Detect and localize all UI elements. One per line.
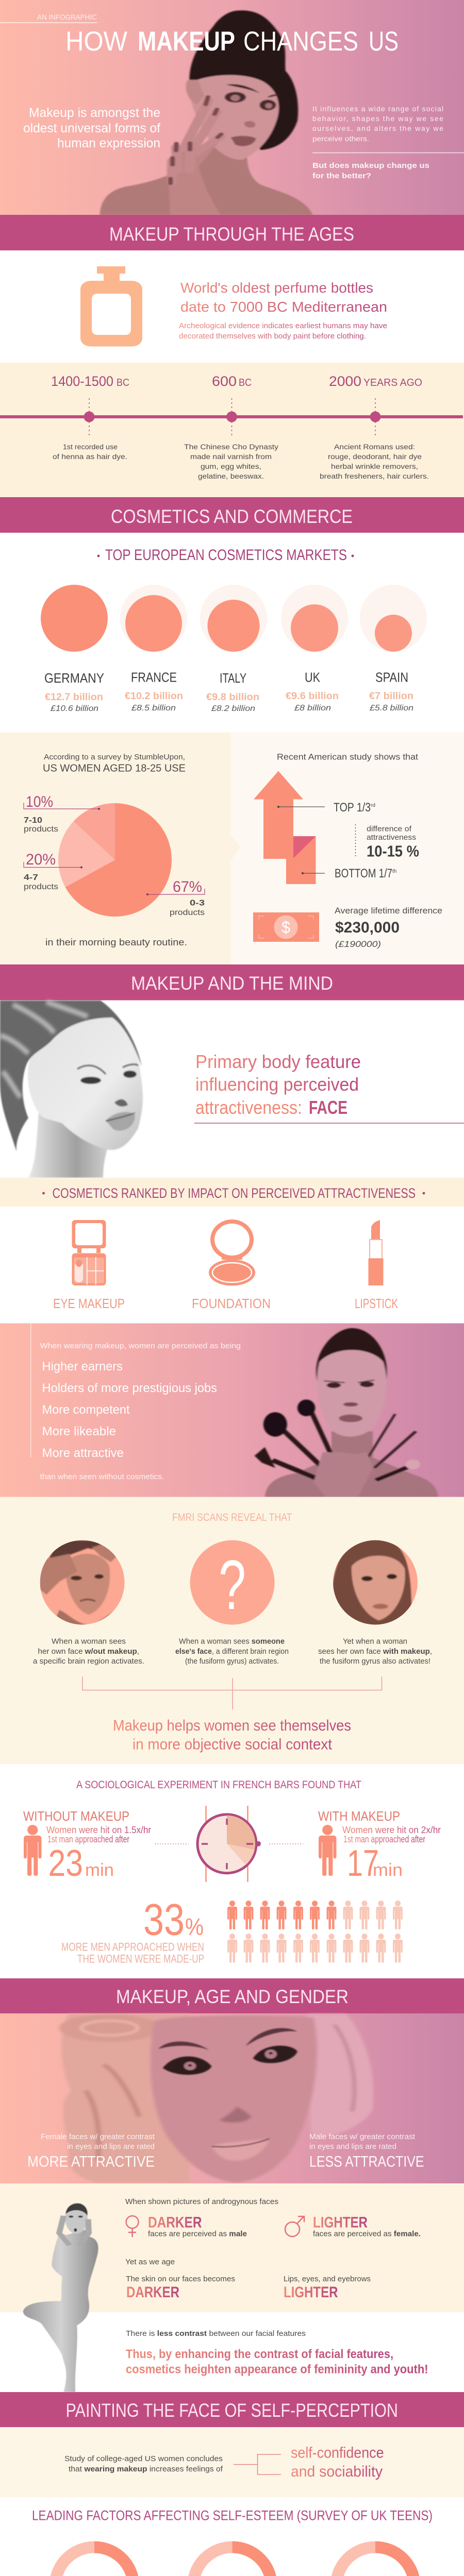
stat: 33 percent more men: MORE MEN APPROACHED WHEN — [61, 1940, 204, 1954]
label: foundation: FOUNDATION — [192, 1296, 271, 1311]
pie label: 67%: 0-3 — [190, 899, 205, 908]
heading band: makeup through the ages — [0, 215, 464, 250]
text: intro left: oldest universal forms of — [23, 121, 160, 135]
text: primary body feature: influencing perceived — [195, 1074, 359, 1095]
timeline: 2000 years ago: YEARS AGO — [363, 377, 422, 388]
stat: 33 percent more men: THE WOMEN WERE MADE-UP — [77, 1953, 204, 1965]
text: intro right: ourselves, and alters the way we — [312, 124, 443, 132]
panel: beauty routine survey: According to a survey by StumbleUpon, — [44, 753, 185, 761]
timeline: 2000 years ago — [320, 374, 429, 480]
panel: contrast and attractiveness — [0, 2013, 464, 2183]
text: intro left — [23, 106, 160, 150]
market: uk: UK — [305, 670, 321, 685]
panel: beauty routine survey: in their morning beauty routine. — [45, 937, 187, 947]
icon: banknote: $ — [281, 918, 290, 937]
market: germany: €12.7 billion — [45, 692, 103, 703]
timeline: 1400-1500 BC — [51, 374, 129, 461]
timeline: 600 BC: BC — [239, 377, 252, 388]
icon: venus symbol — [126, 2216, 139, 2237]
list: perceived traits: More competent — [42, 1403, 130, 1417]
chart: market size circles — [41, 585, 427, 713]
market: uk: £8 billion — [294, 704, 331, 713]
market: spain: €7 billion — [369, 691, 413, 702]
label: bottom seventh: th — [392, 869, 396, 874]
timeline: 2000 years ago: rouge, deodorant, hair dye — [328, 452, 422, 461]
stat: darker perceived male: faces are perceived as male — [148, 2230, 247, 2238]
text: without makeup details: min — [85, 1860, 114, 1880]
timeline: 600 BC: gum, egg whites, — [201, 462, 261, 470]
text: with makeup details: 1st man approached after — [343, 1834, 425, 1844]
icon: up and down arrow bars — [254, 771, 316, 884]
icon: watch — [197, 1806, 261, 1882]
stat: lifetime difference: $230,000 — [335, 919, 400, 936]
panel: self-confidence study: Study of college-aged US women concludes — [64, 2454, 223, 2463]
timeline: 600 BC: The Chinese Cho Dynasty — [184, 443, 278, 451]
text: female faces: in eyes and lips are rated — [67, 2142, 155, 2151]
chart: donut 70% — [189, 2547, 275, 2576]
text: primary body feature — [194, 1051, 464, 1124]
photo: woman touching face — [100, 10, 313, 215]
icon: question mark: ? — [219, 1546, 246, 1624]
text: self-confidence and sociability — [291, 2444, 384, 2480]
photo: blonde woman face — [59, 2014, 373, 2182]
text: perfume bottles: decorated themselves with body paint before clothing. — [179, 332, 366, 341]
dotted connector lines — [155, 1843, 303, 1844]
text: fmri column 1: her own face w/out makeup, — [38, 1647, 139, 1656]
text: with makeup details: Women were hit on 2x/hr — [342, 1825, 441, 1835]
text: fmri column 3: Yet when a woman — [343, 1637, 407, 1646]
text: contrast conclusion — [126, 2329, 428, 2376]
text: primary body feature: FACE — [309, 1097, 347, 1118]
panel: attractiveness and earnings: Recent American study shows that — [277, 752, 418, 761]
panel: fmri scans: FMRI SCANS REVEAL THAT — [172, 1512, 292, 1523]
text: perceived as outro: than when seen without cosmetics. — [40, 1472, 164, 1481]
heading band: painting the face of self-perception: PAINTING THE FACE OF SELF-PERCEPTION — [66, 2400, 398, 2421]
panel: hero — [0, 0, 464, 215]
text: male faces: LESS ATTRACTIVE — [309, 2154, 424, 2170]
stat: darker perceived male — [148, 2214, 247, 2238]
stat: without makeup: WITHOUT MAKEUP — [23, 1808, 129, 1824]
stat: lighter perceived female: LIGHTER — [313, 2214, 368, 2231]
icon: lipstick — [368, 1220, 384, 1285]
stat: without makeup — [23, 1808, 151, 1884]
chart: donut 71% — [25, 2547, 153, 2576]
market: france: €10.2 billion — [125, 691, 183, 702]
label: bottom seventh: BOTTOM 1/7 — [335, 867, 392, 880]
text: with makeup details: 17 — [347, 1843, 379, 1884]
timeline: 2000 years ago: herbal wrinkle removers, — [331, 462, 418, 470]
market: france: £8.5 billion — [131, 704, 176, 713]
stat: skin darker — [126, 2275, 235, 2301]
list: perceived traits: More likeable — [42, 1425, 116, 1438]
text: male faces — [309, 2132, 424, 2170]
pie label: 67%: 67% — [173, 878, 202, 895]
photo: woman with makeup — [330, 1538, 418, 1628]
text: contrast conclusion: Thus, by enhancing the contrast of facial features, — [126, 2347, 393, 2361]
stat: 33 percent more men: 33 — [143, 1895, 185, 1944]
timeline: 1400-1500 BC: of henna as hair dye. — [53, 452, 127, 461]
text: intro left: Makeup is amongst the — [29, 106, 160, 120]
panel: self-confidence study: that wearing makeup increases feelings of — [69, 2465, 223, 2473]
timeline: 600 BC: gelatine, beeswax. — [198, 472, 264, 480]
panel: androgynous faces: Yet as we age — [125, 2258, 175, 2266]
market: germany — [41, 585, 108, 713]
timeline: 1400-1500 BC: 1st recorded use — [63, 443, 118, 451]
photo: woman with brushes — [255, 1328, 438, 1497]
heading band: cosmetics and commerce — [0, 497, 464, 533]
arrow: forked bracket — [234, 2454, 281, 2475]
text: fmri column 3: sees her own face with makeup, — [318, 1647, 432, 1656]
market: italy: ITALY — [220, 670, 246, 686]
timeline: 1400-1500 BC: BC — [117, 377, 129, 388]
title: CHANGES — [243, 26, 358, 57]
panel: perceived as — [0, 1323, 464, 1497]
text: fmri column 1: When a woman sees — [52, 1637, 126, 1646]
pie label: 10% — [24, 793, 100, 834]
text: intro right: for the better? — [312, 172, 371, 180]
icon: eye makeup palette — [72, 1220, 106, 1285]
icon: foundation compact — [209, 1222, 255, 1286]
text: intro right: It influences a wide range of social — [312, 105, 443, 113]
text: male faces: Male faces w/ greater contrast — [309, 2132, 416, 2141]
text: with makeup details — [342, 1825, 441, 1884]
stat: darker perceived male: DARKER — [148, 2214, 202, 2231]
pie label: 10%: 7-10 — [24, 816, 42, 825]
heading band: painting the face of self-perception — [0, 2392, 464, 2427]
stat: lighter perceived female — [313, 2214, 421, 2238]
stat: features lighter — [284, 2275, 371, 2301]
text: self-confidence and sociability: and sociability — [291, 2463, 383, 2480]
text: makeup helps women — [113, 1717, 351, 1753]
title: HOW — [65, 26, 127, 57]
icon: banknote — [253, 912, 319, 942]
text: perceived as intro: When wearing makeup, women are perceived as being — [40, 1342, 241, 1350]
icon: mars symbol — [285, 2216, 304, 2236]
arrow: bracket converging — [82, 1676, 382, 1709]
stat: lifetime difference: (£190000) — [335, 939, 381, 949]
text: primary body feature: attractiveness: — [195, 1097, 302, 1118]
stat: difference of attractiveness: difference of — [367, 824, 412, 834]
text: intro left: human expression — [57, 136, 160, 150]
market: italy: €9.8 billion — [206, 692, 259, 703]
pie chart — [58, 803, 172, 917]
list: perceived traits: Holders of more prestigious jobs — [42, 1381, 217, 1395]
panel: fmri scans — [0, 1497, 464, 1764]
text: contrast conclusion: cosmetics heighten appearance of femininity and youth! — [126, 2363, 428, 2376]
stat: with makeup — [318, 1808, 441, 1884]
stat: 33 percent more men — [61, 1895, 204, 1965]
label: an infographic: AN INFOGRAPHIC — [37, 13, 97, 21]
panel: beauty routine survey — [0, 733, 231, 964]
timeline: 2000 years ago: breath fresheners, hair curlers. — [320, 472, 429, 480]
icon: person — [319, 1825, 336, 1876]
text: makeup helps women: in more objective social context — [132, 1736, 333, 1753]
label: top third: rd — [371, 803, 375, 808]
text: perfume bottles: date to 7000 BC Mediterranean — [180, 299, 387, 315]
text: fmri column 1: a specific brain region activates. — [33, 1657, 144, 1666]
market: france — [120, 585, 187, 713]
panel: beauty routine survey: US WOMEN AGED 18-25 USE — [43, 762, 186, 774]
chart: people pictogram — [227, 1901, 403, 1963]
heading band: makeup through the ages: MAKEUP THROUGH THE AGES — [109, 224, 354, 245]
pie label: 10%: products — [24, 825, 58, 834]
market: spain: £5.8 billion — [369, 704, 413, 713]
text: female faces: MORE ATTRACTIVE — [27, 2154, 155, 2170]
photo: figure — [23, 2203, 98, 2392]
stat: difference of attractiveness: attractiveness — [367, 833, 416, 842]
text: without makeup details: 1st man approached after — [47, 1834, 129, 1844]
pie label: 20%: 4-7 — [24, 873, 38, 882]
text: fmri column 2 — [175, 1637, 289, 1666]
market: uk — [281, 585, 348, 713]
stat: lifetime difference: Average lifetime difference — [335, 906, 442, 916]
timeline: 600 BC: made nail varnish from — [190, 452, 272, 461]
stat: skin darker: DARKER — [126, 2284, 179, 2301]
icon: question mark — [190, 1540, 275, 1625]
heading: top european cosmetics markets: TOP EUROPEAN COSMETICS MARKETS — [105, 547, 347, 564]
label: lipstick: LIPSTICK — [355, 1296, 398, 1311]
market: spain — [360, 585, 427, 713]
text: without makeup details — [46, 1825, 151, 1884]
icon: perfume bottle — [80, 266, 142, 346]
label: top third: TOP 1/3 — [334, 801, 371, 815]
panel: attractiveness and earnings — [231, 733, 464, 964]
text: intro right: perceive others. — [312, 134, 369, 143]
timeline: 2000 years ago: Ancient Romans used: — [334, 443, 415, 451]
text: perfume bottles: World's oldest perfume bottles — [180, 280, 373, 296]
heading band: makeup and the mind — [0, 964, 464, 1001]
heading band: makeup and the mind: MAKEUP AND THE MIND — [131, 973, 333, 994]
icon: person — [24, 1825, 41, 1876]
market: germany: GERMANY — [44, 670, 104, 686]
text: fmri column 1 — [33, 1637, 144, 1666]
market: italy — [200, 585, 267, 713]
timeline: 1400-1500 BC: 1400-1500 — [51, 374, 113, 389]
text: makeup helps women: Makeup helps women see themselves — [113, 1717, 351, 1734]
stat: features lighter: Lips, eyes, and eyebrows — [284, 2275, 371, 2283]
sub-element: eyes and brows — [158, 2028, 297, 2147]
pie label: 10%: 10% — [26, 793, 53, 810]
text: contrast conclusion: There is less contrast between our facial features — [126, 2329, 306, 2338]
list: perceived traits: More attractive — [42, 1446, 124, 1460]
heading: sociological experiment: A SOCIOLOGICAL EXPERIMENT IN FRENCH BARS FOUND THAT — [76, 1779, 361, 1791]
timeline: 600 BC: 600 — [212, 374, 237, 389]
market: france: FRANCE — [131, 670, 177, 685]
pie label: 20%: products — [24, 883, 58, 891]
market: uk: €9.6 billion — [286, 691, 339, 702]
text: female faces: Female faces w/ greater contrast — [41, 2132, 155, 2141]
heading band: cosmetics and commerce: COSMETICS AND COMMERCE — [111, 506, 353, 527]
panel: self-confidence study — [0, 2427, 464, 2498]
text: fmri column 3: the fusiform gyrus also activates! — [320, 1657, 430, 1666]
heading band: makeup, age and gender: MAKEUP, AGE AND GENDER — [116, 1986, 349, 2007]
panel: androgynous faces — [0, 2183, 464, 2312]
stat: lifetime difference — [335, 906, 442, 949]
chart: donut 44% — [315, 2547, 435, 2576]
text: fmri column 2: When a woman sees someone — [179, 1637, 285, 1646]
pie label: 67%: products — [170, 908, 205, 917]
text: perfume bottles — [179, 280, 387, 341]
text: primary body feature: Primary body feature — [195, 1051, 361, 1072]
label: eye makeup: EYE MAKEUP — [53, 1296, 125, 1311]
stat: features lighter: LIGHTER — [284, 2284, 338, 2301]
stat: difference of attractiveness — [356, 824, 419, 860]
heading strip: cosmetics ranked — [0, 1178, 464, 1207]
title — [65, 26, 399, 57]
text: without makeup details: Women were hit on 1.5x/hr — [46, 1825, 151, 1835]
text: male faces: in eyes and lips are rated — [309, 2142, 396, 2151]
photo: greyscale face — [0, 1001, 143, 1178]
panel: timeline — [0, 363, 464, 497]
timeline: 2000 years ago: 2000 — [329, 374, 361, 389]
text: perfume bottles: Archeological evidence indicates earliest humans may have — [179, 321, 387, 330]
stat: with makeup: WITH MAKEUP — [318, 1808, 400, 1824]
panel: androgynous faces: When shown pictures of androgynous faces — [125, 2197, 278, 2206]
market: italy: £8.2 billion — [211, 704, 255, 713]
stat: lighter perceived female: faces are perceived as female. — [313, 2230, 421, 2238]
text: with makeup details: min — [373, 1860, 403, 1880]
text: without makeup details: 23 — [48, 1843, 83, 1884]
market: germany: £10.6 billion — [50, 704, 98, 713]
text: fmri column 3 — [318, 1637, 432, 1666]
pie label: 20% — [24, 851, 82, 891]
stat: skin darker: The skin on our faces becomes — [126, 2275, 235, 2283]
title: US — [369, 26, 399, 57]
stat: difference of attractiveness: 10-15 % — [367, 842, 419, 860]
list: perceived traits — [42, 1360, 217, 1460]
market: spain: SPAIN — [375, 670, 408, 685]
text: fmri column 2: (the fusiform gyrus) activates. — [185, 1657, 279, 1666]
text: fmri column 2: else's face, a different brain region — [175, 1647, 289, 1656]
photo: woman without makeup — [40, 1540, 125, 1628]
pie label: 67% — [146, 878, 205, 917]
heading band: makeup, age and gender — [0, 1978, 464, 2013]
list: perceived traits: Higher earners — [42, 1360, 123, 1374]
text: intro right: behavior, shapes the way we see — [312, 114, 443, 123]
pie label: 20%: 20% — [26, 851, 56, 868]
text: intro right — [312, 105, 464, 180]
title: MAKEUP — [138, 26, 235, 57]
timeline: 600 BC — [184, 374, 278, 480]
text: intro right: But does makeup change us — [312, 161, 429, 170]
stat: 33 percent more men: % — [185, 1913, 204, 1940]
text: self-confidence and sociability: self-confidence — [291, 2444, 384, 2462]
label: bottom seventh — [302, 867, 396, 880]
label: top third — [277, 801, 375, 815]
text: female faces — [27, 2132, 155, 2170]
